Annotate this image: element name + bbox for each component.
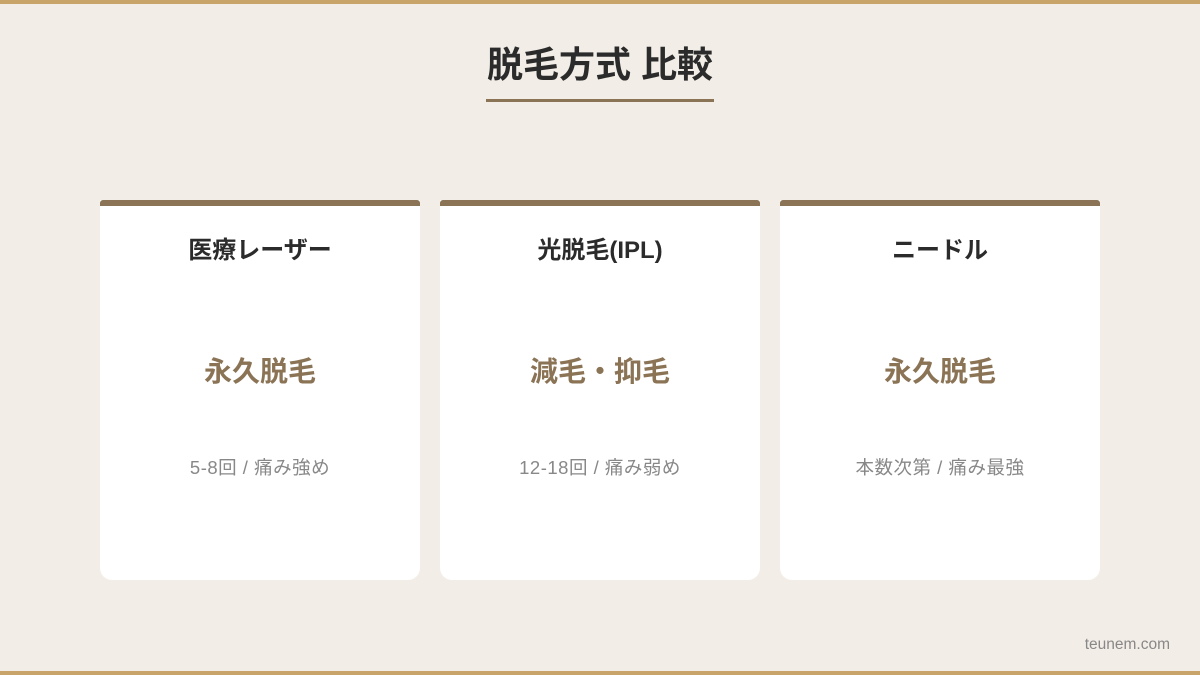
heading: medical laser: 医療レーザー	[188, 237, 332, 264]
heading: needle: ニードル	[892, 237, 988, 264]
effect: needle: 永久脱毛	[884, 356, 996, 387]
panel: needle	[780, 200, 1100, 580]
heading: IPL: 光脱毛(IPL)	[537, 237, 663, 264]
details: medical laser: 5-8回 / 痛み強め	[190, 457, 330, 478]
details: IPL: 12-18回 / 痛み弱め	[519, 457, 681, 478]
effect: medical laser: 永久脱毛	[204, 356, 316, 387]
panel: medical laser	[100, 200, 420, 580]
effect: IPL: 減毛・抑毛	[530, 356, 670, 387]
title: 脱毛方式 比較	[487, 44, 713, 85]
details: needle: 本数次第 / 痛み最強	[856, 457, 1024, 478]
footer: site: teunem.com	[1085, 636, 1170, 653]
panel: IPL	[440, 200, 760, 580]
